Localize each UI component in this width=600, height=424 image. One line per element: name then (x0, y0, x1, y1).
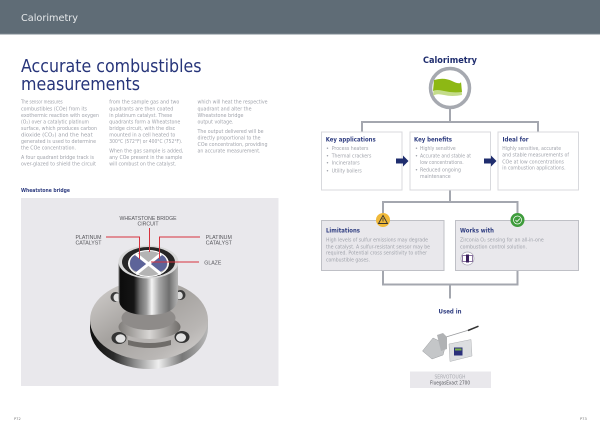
panel: ideal for: in combustion applications. (502, 166, 566, 172)
label: platinum catalyst left: PLATINUM (76, 235, 102, 241)
label: platinum catalyst left: CATALYST (76, 240, 102, 246)
main title (21, 56, 202, 95)
body text column 3: The output delivered will be (197, 129, 264, 135)
body text column 3: quadrant and alter the (198, 106, 252, 112)
body text column 3: Wheatstone bridge (198, 113, 244, 119)
used in heading: Used in (438, 308, 462, 316)
panel: key applications: • (326, 169, 329, 175)
panel: key applications: • (326, 146, 329, 152)
panel: key benefits: • (415, 146, 418, 152)
body text column 1: dioxide (CO₂) and the heat (21, 132, 93, 138)
panel: key applications: Incinerators (332, 161, 360, 167)
body text column 1 (20, 100, 99, 168)
body text column 3: output voltage. (198, 119, 234, 125)
product label: FluegasExact 2700 (430, 380, 470, 386)
panel: ideal for: COe at low concentrations (502, 159, 564, 165)
panel: key benefits (410, 132, 490, 190)
panel: key benefits: Accurate and stable at (420, 153, 471, 159)
panel: limitations: required. Potential cross sensitivity to other (326, 251, 428, 257)
header band (0, 0, 600, 34)
panel: limitations: Limitations (326, 227, 360, 235)
main title: Accurate combustibles (21, 56, 202, 77)
panel: key applications: • (326, 161, 329, 167)
illustration: sensor flange (90, 246, 208, 369)
body text column 3 (197, 100, 268, 154)
diagram heading: Wheatstone bridge (21, 188, 70, 194)
icon: check (510, 213, 524, 227)
panel: key applications: Key applications (326, 136, 376, 144)
body text column 1: exothermic reaction with oxygen (21, 113, 99, 119)
icon: calorimetry circle (430, 68, 470, 108)
product label: SERVOTOUGH (434, 374, 466, 380)
icon: zirconia sensor (461, 252, 474, 265)
panel: works with: Works with (460, 227, 494, 235)
body text column 2: quadrants form a Wheatstone (109, 119, 180, 125)
body text column 1: A four quadrant bridge track is (21, 155, 94, 161)
body text column 1: the COe concentration. (21, 146, 76, 152)
main title: measurements (21, 74, 140, 95)
body text column 2: any COe present in the sample (109, 155, 182, 161)
panel: key applications: Utility boilers (332, 169, 362, 175)
body text column 2: from the sample gas and two (109, 100, 179, 106)
header title: Calorimetry (21, 13, 78, 24)
body text column 2 (109, 100, 184, 168)
body text column 3: which will heat the respective (198, 100, 268, 106)
connectors (362, 108, 538, 298)
panel: key benefits: • (415, 153, 418, 159)
body text column 3: directly proportional to the (198, 135, 260, 141)
body text column 2: When the gas sample is added, (109, 148, 184, 154)
panel: key applications: • (326, 153, 329, 159)
body text column 2: in platinum catalyst. These (109, 113, 172, 119)
product image: analyzer (422, 326, 478, 362)
panel: key benefits: Reduced ongoing (420, 167, 461, 173)
panel: ideal for: Ideal for (502, 136, 529, 144)
panel: wheatstone bridge diagram (21, 198, 278, 386)
panel: limitations: High levels of sulfur emissions may degrade (326, 238, 428, 244)
panel: limitations: combustible gases. (326, 257, 370, 263)
panel: key benefits: • (415, 167, 418, 173)
body text column 2: will combust on the catalyst. (109, 162, 177, 168)
panel: key benefits: Highly sensitive (420, 146, 456, 152)
panel: key benefits: maintenance (420, 174, 451, 180)
label: wheatstone bridge circuit: CIRCUIT (138, 222, 159, 228)
body text column 3: an accurate measurement. (198, 148, 261, 154)
body text column 1: surface, which produces carbon (21, 126, 97, 132)
panel: works with: Zirconia O₂ sensing for an all-in-one (460, 238, 544, 244)
panel: ideal for: and stable measurements of (502, 153, 569, 159)
body text column 3: COe concentration, providing (198, 142, 268, 148)
panel: key applications: Thermal crackers (331, 153, 372, 159)
label: wheatstone bridge circuit (120, 216, 177, 228)
panel: works with: combustion control solution. (460, 244, 527, 250)
panel: key applications (322, 132, 402, 190)
page number left: P72 (14, 417, 21, 421)
panel: key benefits: Key benefits (414, 136, 452, 144)
panel: key applications: Process heaters (332, 146, 369, 152)
label: glaze: GLAZE (204, 260, 222, 266)
panel: limitations (322, 220, 444, 270)
label: wheatstone bridge circuit: WHEATSTONE BRIDGE (120, 216, 177, 222)
panel: works with (456, 220, 578, 270)
callout lines (106, 228, 200, 262)
body text column 2: quadrants are then coated (109, 106, 173, 112)
arrow: benefits to ideal for (484, 156, 496, 166)
panel: key benefits: low concentrations. (420, 160, 464, 166)
body text column 1: (O₂) over a catalytic platinum (21, 119, 89, 125)
icon: warning (376, 213, 390, 227)
body text column 1: generated is used to determine (21, 139, 96, 145)
panel: limitations: the catalyst. A sulfur-resistant sensor may be (326, 244, 430, 250)
label: platinum catalyst left (76, 235, 102, 246)
page number right: P73 (580, 417, 587, 421)
panel: ideal for: Highly sensitive, accurate (502, 146, 561, 152)
body text column 2: 300°C (572°F) or 400°C (752°F). (109, 139, 183, 145)
arrow: applications to benefits (396, 156, 408, 166)
body text column 2: bridge circuit, with the disc (109, 126, 176, 132)
label: platinum catalyst right: CATALYST (206, 240, 232, 246)
body text column 1: The sensor measures (20, 100, 63, 106)
body text column 1: over-glazed to shield the circuit (21, 162, 96, 168)
body text column 2: mounted in a cell heated to (109, 132, 175, 138)
panel: ideal for (498, 132, 578, 190)
body text column 1: combustibles (COe) from its (21, 106, 87, 112)
product label (410, 372, 491, 388)
flow title: Calorimetry (423, 56, 477, 66)
label: platinum catalyst right (206, 235, 232, 246)
label: platinum catalyst right: PLATINUM (206, 235, 232, 241)
